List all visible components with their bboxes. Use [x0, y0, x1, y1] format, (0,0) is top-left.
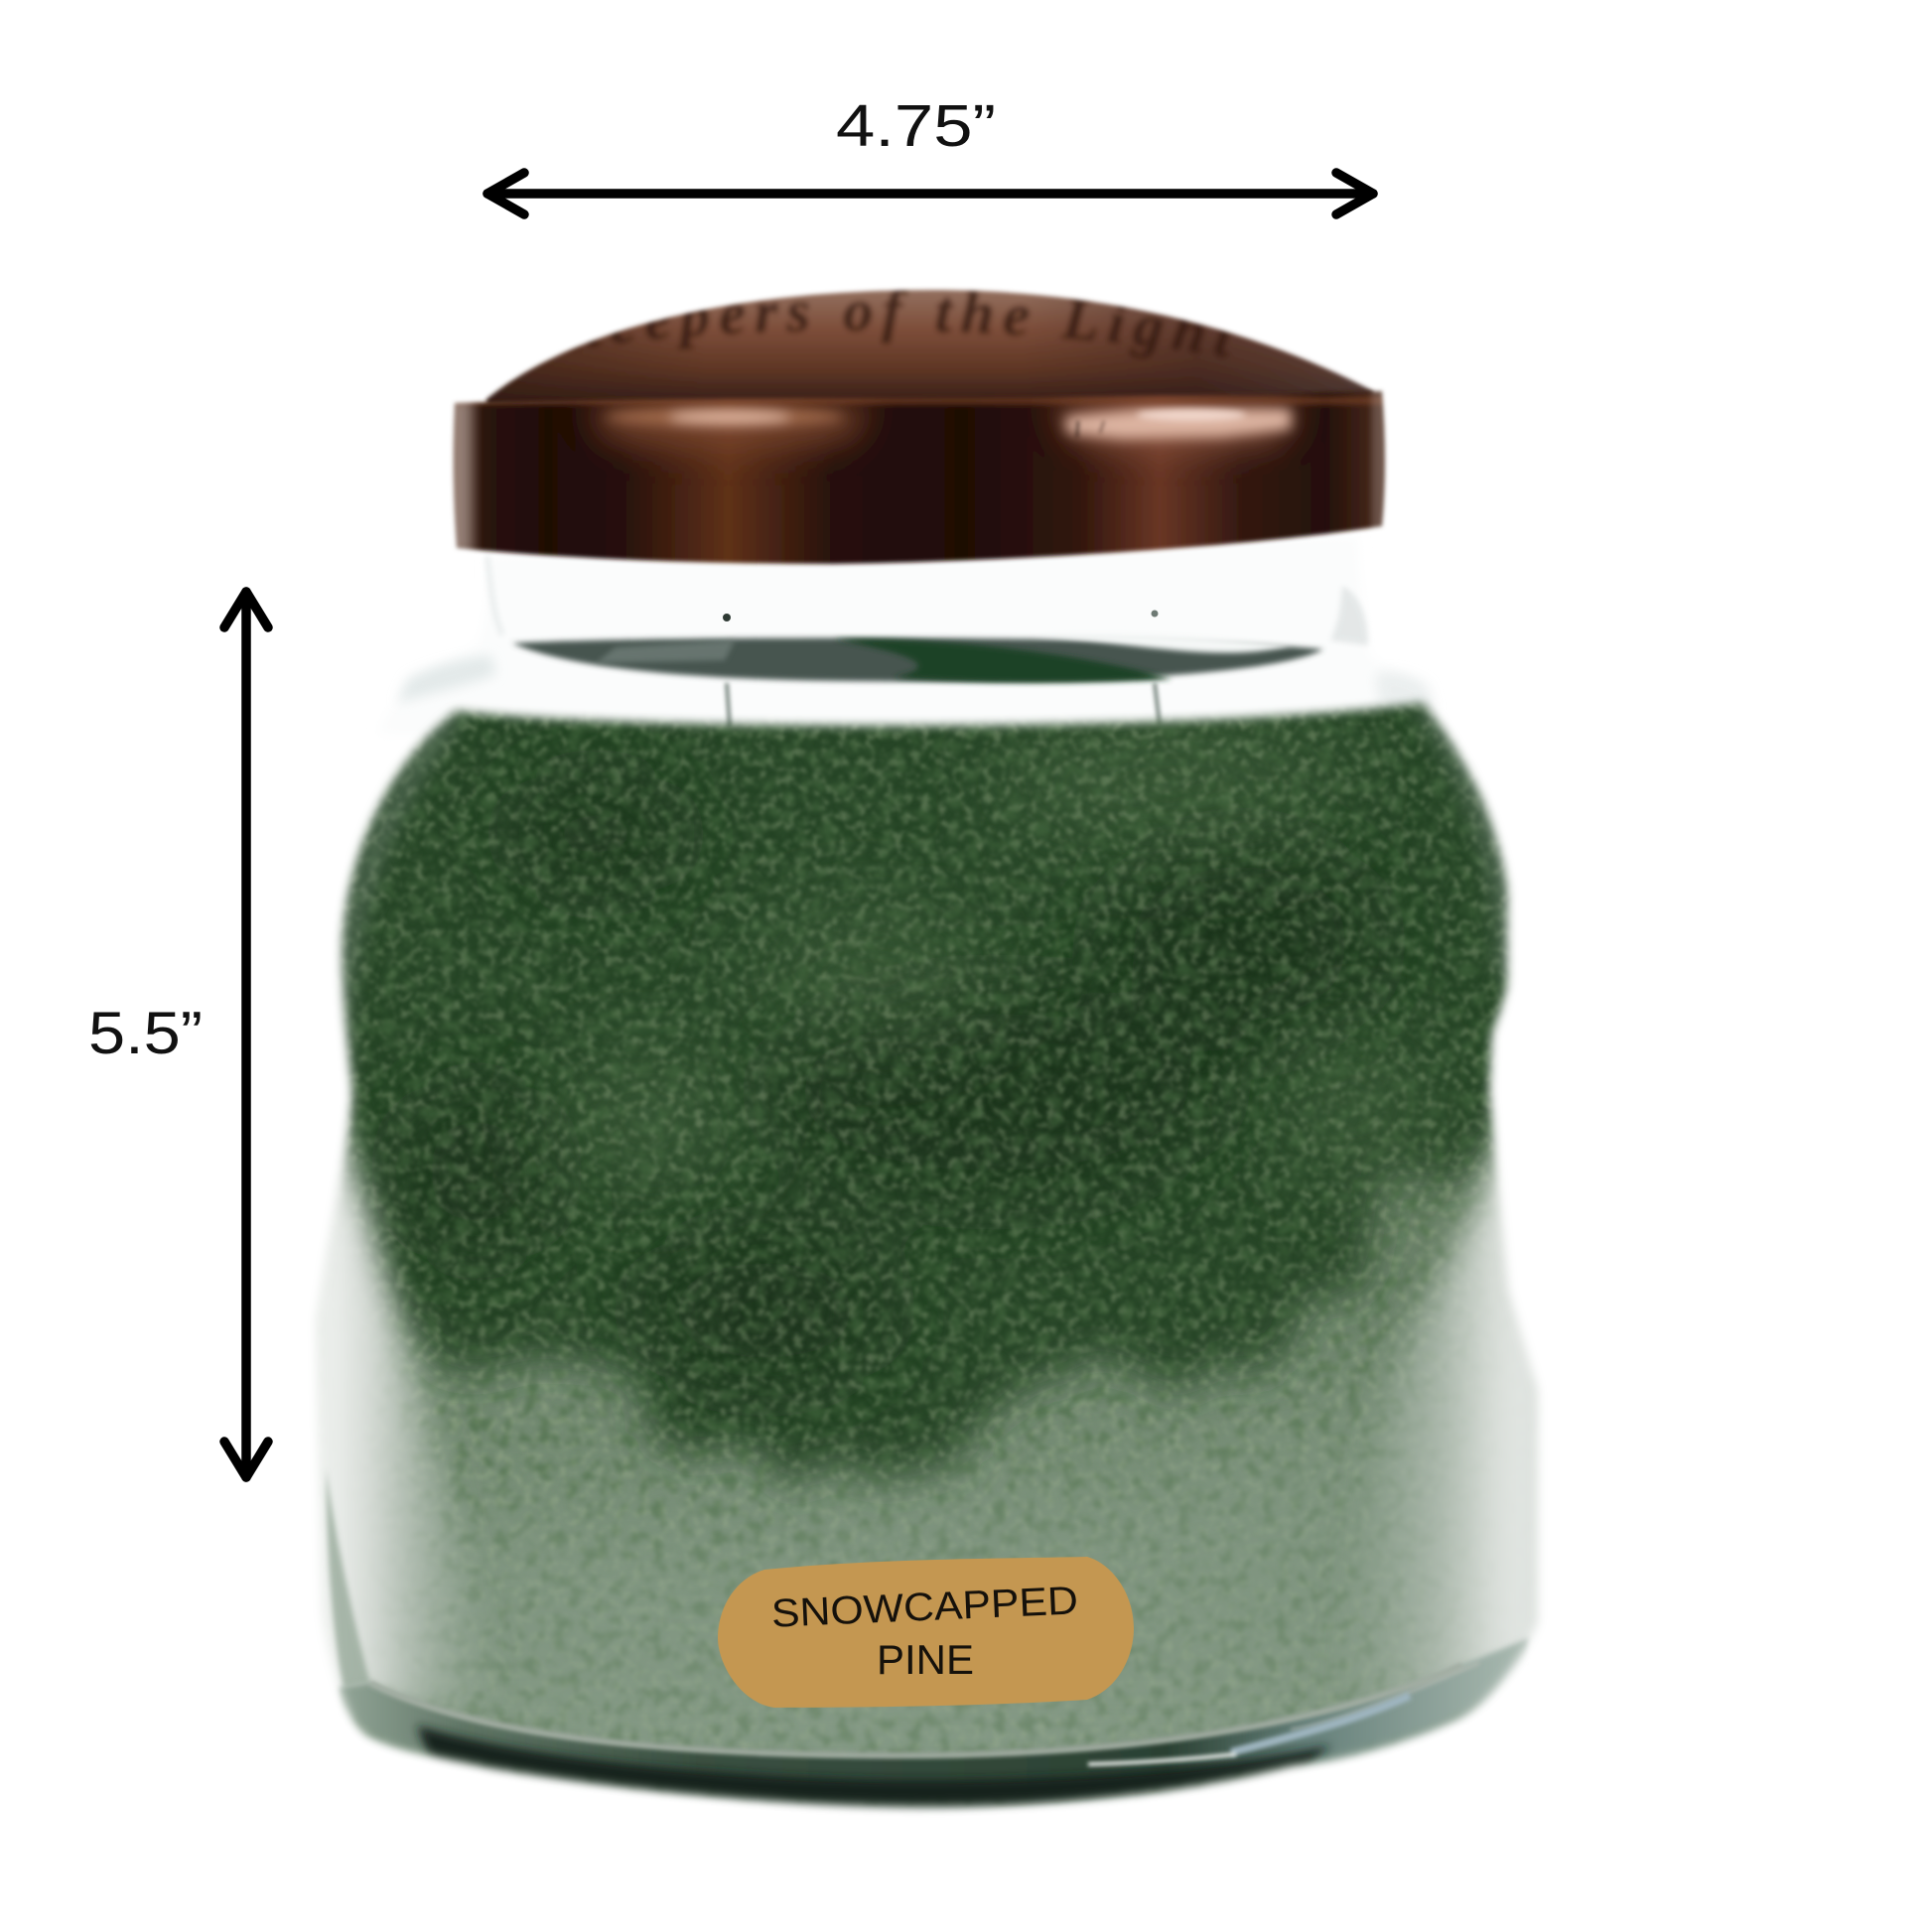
height value label: 5.5” [88, 1000, 203, 1066]
label text: PINE [877, 1636, 974, 1683]
dark wax patches [397, 774, 1380, 1390]
width value label: 4.75” [836, 93, 996, 159]
wax pool seen through the neck [512, 638, 1323, 681]
frosted glass edges [298, 1072, 1559, 1708]
height dimension: 5.5 inches [88, 592, 268, 1477]
gray glass sliver lower left [326, 1469, 370, 1688]
wax body [315, 695, 1541, 1813]
infographic: candle jar with dimensions [91, 105, 1541, 1815]
embossed lid lettering: Keepers of the Light [573, 288, 1231, 359]
glass neck and shoulder [377, 536, 1435, 735]
jar base glass [338, 1638, 1529, 1822]
lid: copper rim [447, 387, 1392, 571]
lower wax pale haze [318, 1370, 1549, 1787]
dark green upper wax [339, 701, 1511, 1506]
candle jar photo [315, 286, 1541, 1815]
width dimension: 4.75 inches [487, 93, 1373, 214]
rim highlights [586, 402, 874, 452]
product label sticker [718, 1557, 1134, 1708]
light wax patches [546, 725, 1420, 1181]
label text: SNOWCAPPED [770, 1579, 1079, 1636]
gray edge shading on the upper sides [342, 703, 1507, 1082]
lid: dome top [483, 286, 1376, 405]
label text [770, 1579, 1079, 1683]
arrow: vertical double-headed [224, 592, 268, 1477]
arrow: horizontal double-headed [487, 173, 1373, 214]
wax mottling texture [318, 695, 1549, 1807]
